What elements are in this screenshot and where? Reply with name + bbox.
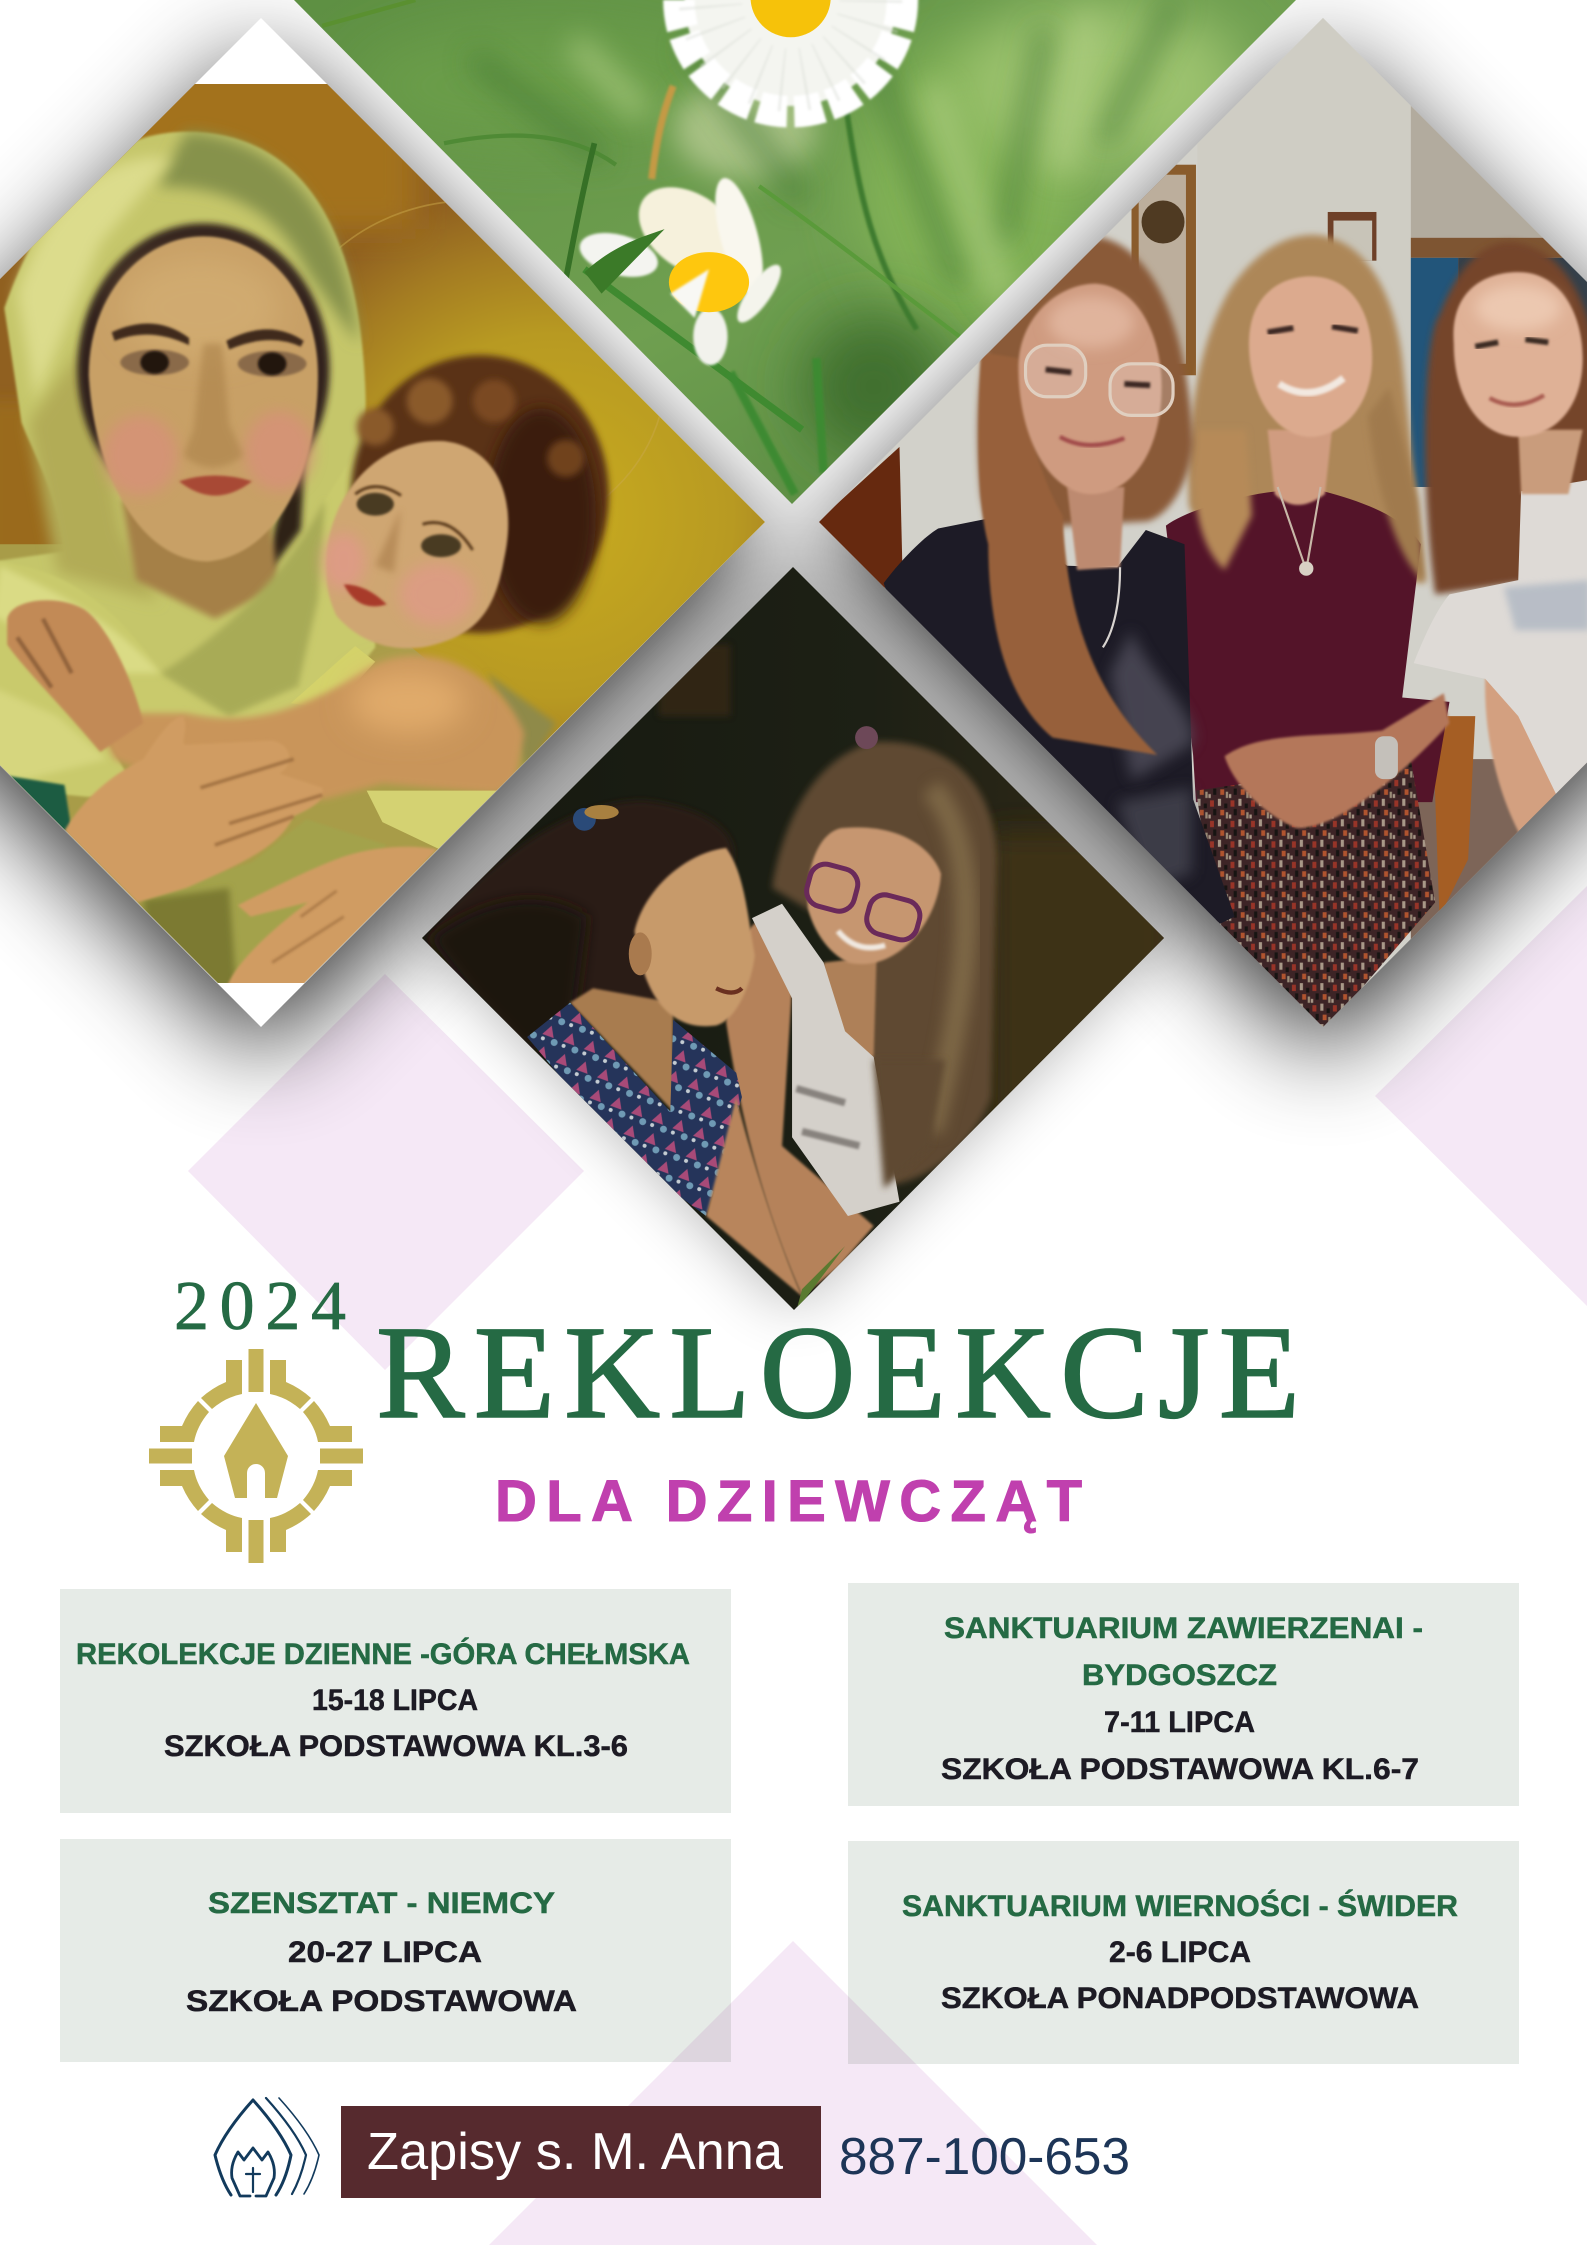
- text: Bydgoszcz: [941, 1612, 1423, 1786]
- pink diamond left: [188, 974, 584, 1370]
- text: Bydgoszcz: SANKTUARIUM ZAWIERZENAI -: [944, 1612, 1423, 1645]
- hair: [77, 223, 329, 516]
- callout: enrolment label: Zapisy s. M. Anna: [367, 2123, 783, 2181]
- child hair: [351, 355, 609, 633]
- text: Góra Chełmska: REKOLEKCJE DZIENNE -GÓRA CHEŁMSKA: [76, 1637, 690, 1671]
- pink diamond bottom: [489, 1941, 1097, 2245]
- veil: [0, 132, 366, 732]
- text: phone number: 887-100-653: [839, 2128, 1130, 2186]
- text: Bydgoszcz: SZKOŁA PODSTAWOWA KL.6-7: [941, 1753, 1419, 1786]
- scarf wrap: [0, 604, 376, 798]
- text: Szensztat: 20-27 LIPCA: [288, 1936, 482, 1969]
- shadow behind centre diamond: [422, 565, 1164, 1308]
- subheading: DLA DZIEWCZĄT: DLA DZIEWCZĄT: [495, 1469, 1082, 1534]
- photo: two girls: [415, 559, 1174, 1318]
- text: Bydgoszcz: 7-11 LIPCA: [1104, 1706, 1255, 1739]
- floor and door: [1411, 759, 1587, 1003]
- panel: Bydgoszcz: [848, 1583, 1519, 1806]
- photo: Madonna and Child painting: [0, 18, 788, 1027]
- lower figure base: [0, 544, 530, 1003]
- girl right: [772, 742, 997, 1186]
- picture frames: [1132, 165, 1196, 375]
- text: Szensztat: [186, 1887, 577, 2018]
- panel: Szensztat: [60, 1839, 731, 2062]
- panel: Świder: [848, 1841, 1519, 2064]
- child arm: [92, 656, 524, 802]
- text: Szensztat: SZENSZTAT - NIEMCY: [208, 1887, 555, 1920]
- heading: year 2024: 2024: [174, 1268, 346, 1345]
- photo: three girls: [802, 0, 1587, 1046]
- text: Góra Chełmska: SZKOŁA PODSTAWOWA KL.3-6: [164, 1730, 628, 1763]
- girl 1: [884, 238, 1235, 974]
- text: Świder: SZKOŁA PONADPODSTAWOWA: [941, 1982, 1419, 2015]
- top daisy: [685, 0, 897, 106]
- mother's lower hand: [64, 716, 323, 902]
- neck: [122, 500, 279, 619]
- mother's upper hand: [226, 847, 437, 988]
- icon: gold shrine emblem: [149, 1349, 363, 1563]
- text: Świder: SANKTUARIUM WIERNOŚCI - ŚWIDER: [902, 1889, 1458, 1923]
- robe: [144, 909, 216, 981]
- child face: [326, 441, 508, 648]
- shadows behind photo diamonds: [0, 48, 1587, 1057]
- text: Bydgoszcz: BYDGOSZCZ: [1082, 1659, 1277, 1692]
- text: Góra Chełmska: [76, 1637, 690, 1763]
- heading: REKLOEKCJE: REKLOEKCJE: [376, 1298, 1300, 1446]
- text: Świder: [902, 1889, 1458, 2015]
- lower daisy: [575, 225, 663, 285]
- text: Szensztat: SZKOŁA PODSTAWOWA: [186, 1985, 577, 2018]
- child hand on scarf: [7, 600, 143, 752]
- face: [89, 236, 318, 561]
- girl 3: [1414, 242, 1587, 859]
- girl 2: [1166, 235, 1449, 1031]
- callout: enrolment label: [341, 2106, 821, 2198]
- text: Świder: 2-6 LIPCA: [1109, 1936, 1251, 1969]
- photo: daisies in grass: [272, 0, 1318, 523]
- child strap: [488, 675, 556, 764]
- icon: navy chapel logo: [215, 2098, 319, 2196]
- girl left: [424, 801, 734, 1053]
- sash: [367, 791, 497, 849]
- text: Góra Chełmska: 15-18 LIPCA: [312, 1684, 478, 1717]
- panel: Góra Chełmska: [60, 1589, 731, 1813]
- pink diamond right: [1375, 886, 1587, 1306]
